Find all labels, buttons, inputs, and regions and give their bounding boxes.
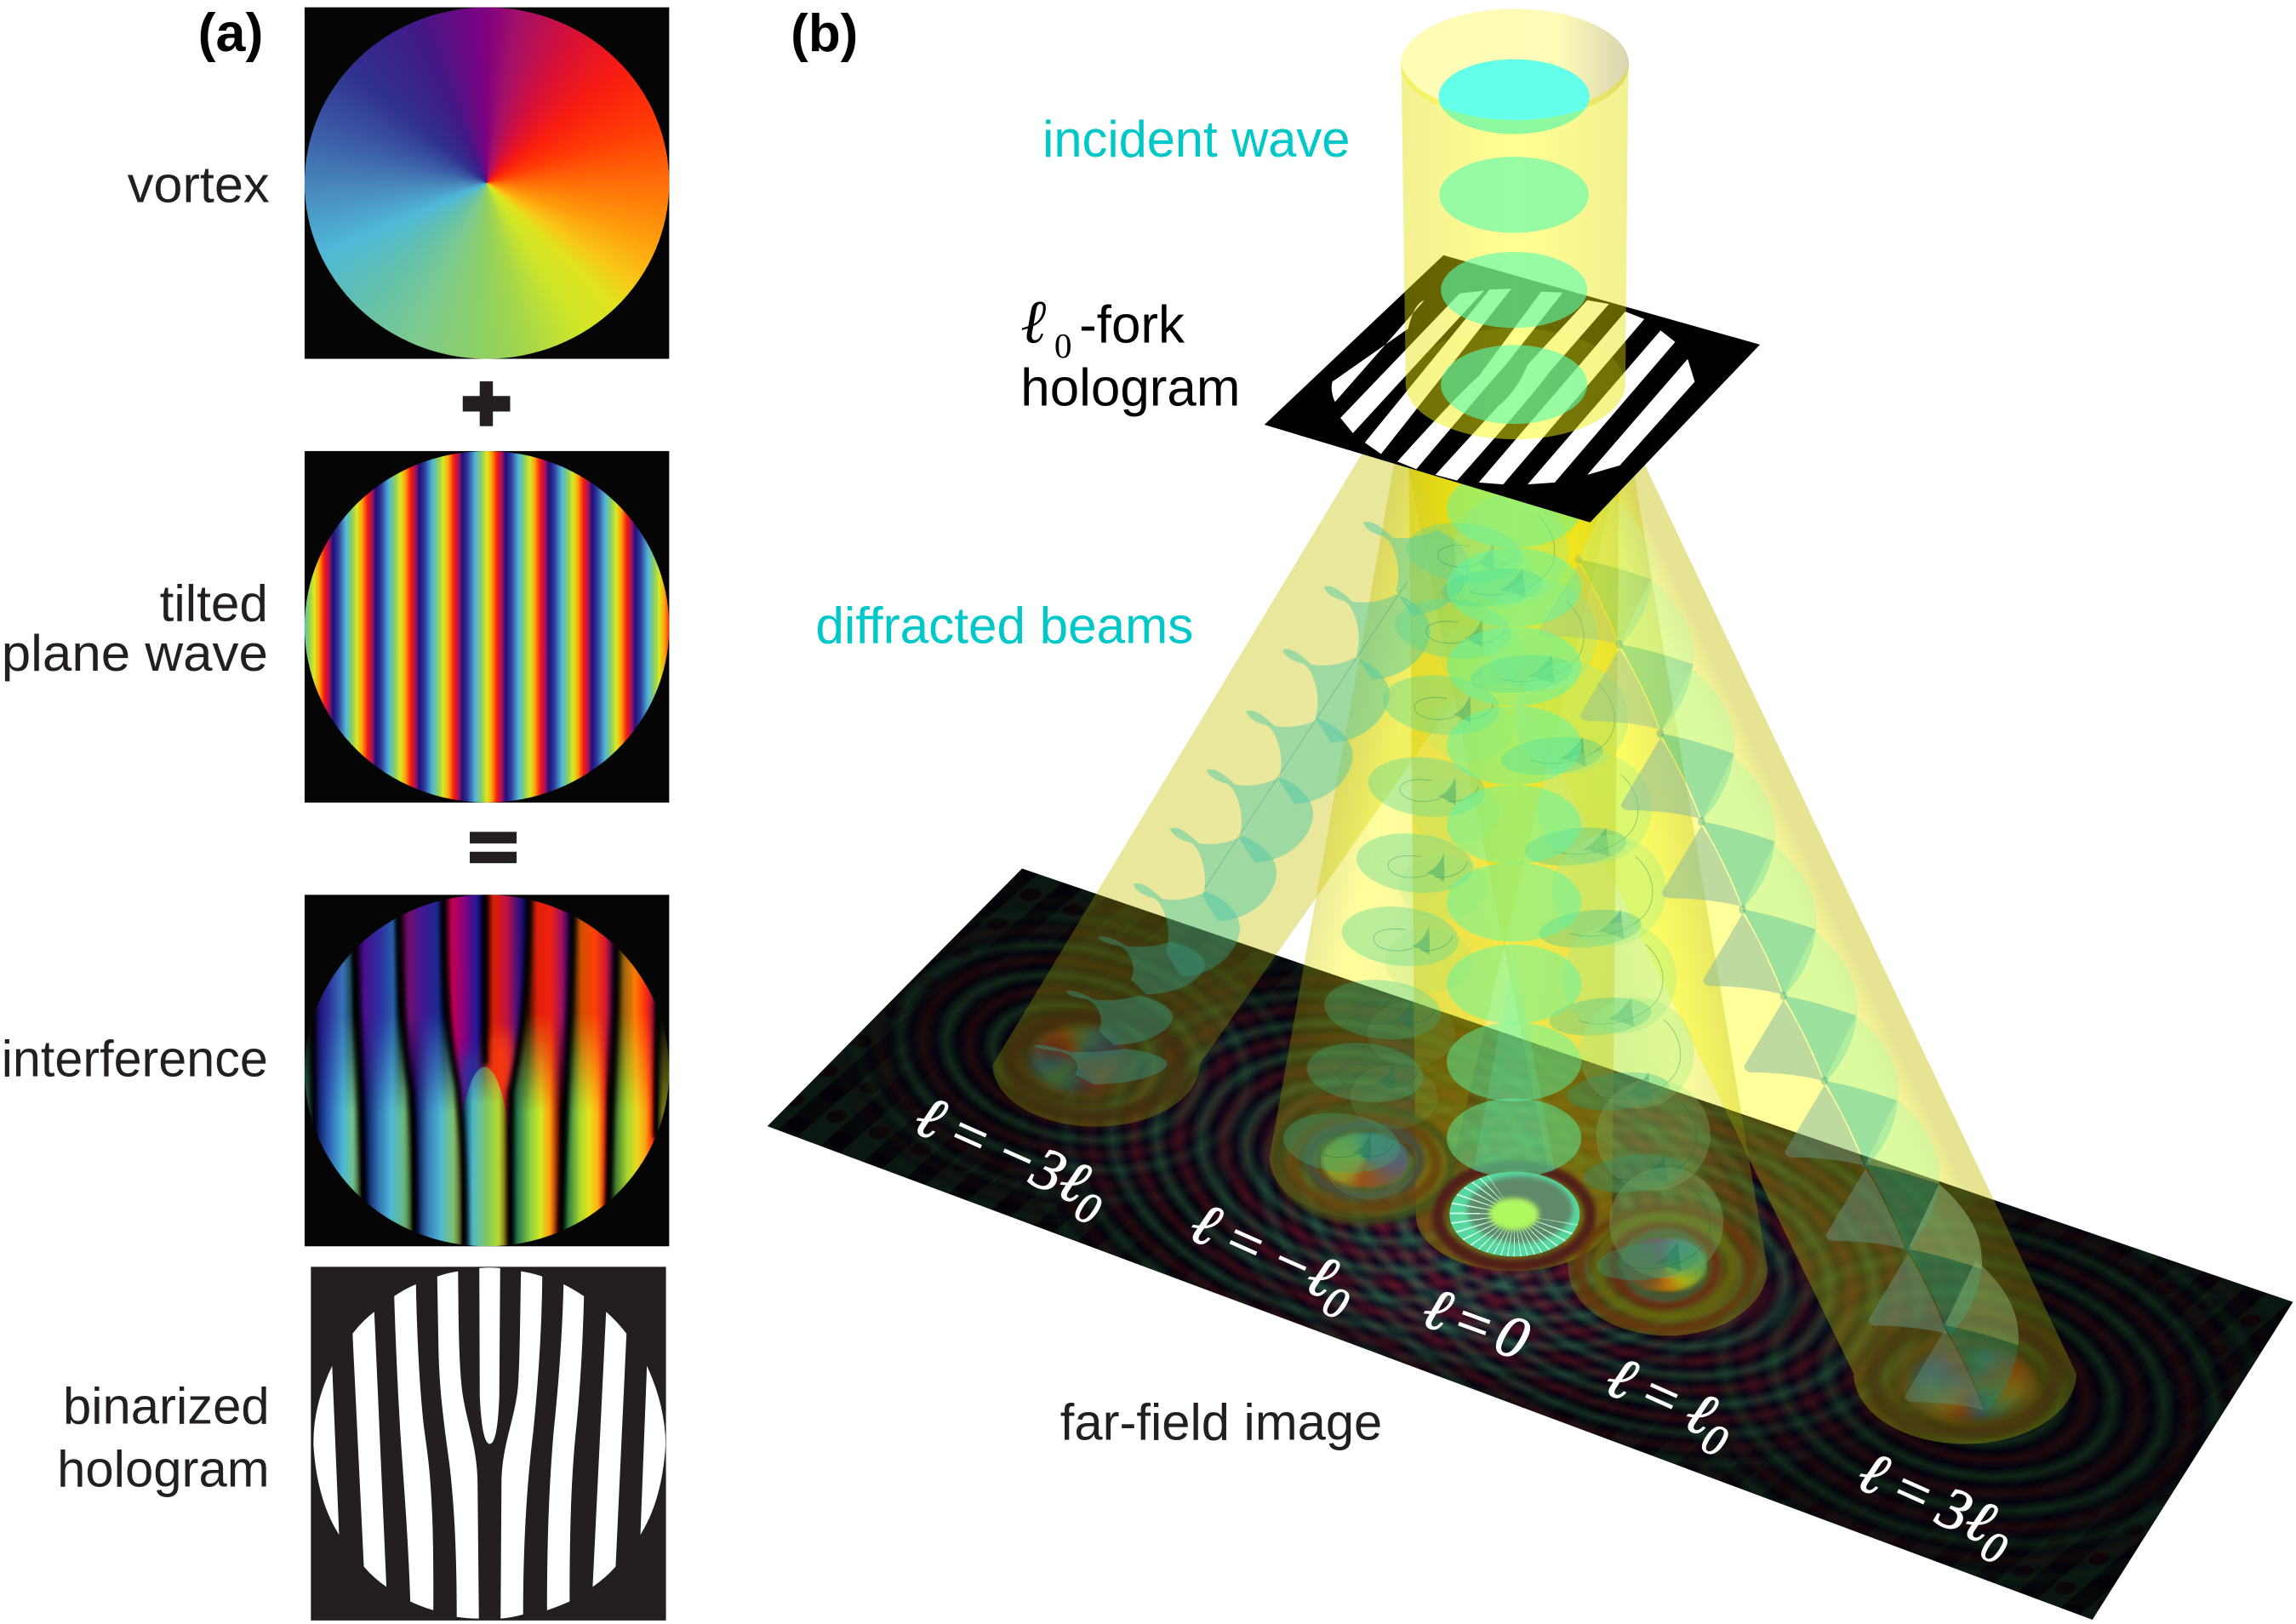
- text: tilted plane wave: tilted: [160, 575, 268, 632]
- focal spot with radial rays: l = 0: [1449, 1171, 1580, 1256]
- vortex spot: l = 1: [1622, 1238, 1707, 1292]
- text: vortex: vortex: [128, 155, 270, 213]
- text: l0-fork hologram: -fork: [1079, 296, 1185, 355]
- text: diffracted beams: diffracted beams: [815, 596, 1193, 654]
- diffracted beam: l = +3: [1398, 439, 2076, 1444]
- wavefront spirals: l = -1 beam: [1280, 518, 1538, 1199]
- text: far-field image: far-field image: [1060, 1392, 1382, 1450]
- incident wave cylinder: [1401, 9, 1629, 439]
- panel: interference fork pattern: [302, 894, 672, 1251]
- plane shading over beams: [768, 868, 2293, 1620]
- incident wavefront discs: [1439, 60, 1590, 424]
- label: l = l0: 0: [1694, 1414, 1734, 1467]
- wavefront spirals: l = -3 beam: [1034, 522, 1470, 1084]
- text: l0-fork hologram: [1020, 289, 1240, 418]
- panel: far-field image plane: [768, 868, 2296, 1620]
- vortex spot: l = -1: [1321, 1132, 1408, 1187]
- plane shading over wavefronts: [768, 868, 2293, 1620]
- label: l = 3 l0: ℓ = 3ℓ: [1848, 1438, 2005, 1557]
- text: l0-fork hologram: 0: [1054, 326, 1072, 365]
- panel: vortex phase disc: [305, 8, 669, 359]
- text: binarized hologram: binarized: [63, 1376, 270, 1434]
- panel: binarized fork hologram: [311, 1267, 666, 1621]
- diffracted beam: l = -1: [1270, 439, 1625, 1219]
- label: l = 0: ℓ=0: [1414, 1274, 1543, 1375]
- text: binarized hologram: hologram: [57, 1439, 270, 1497]
- text: binarized hologram: [57, 1376, 270, 1497]
- label: l = l0: ℓ = ℓ: [1596, 1343, 1726, 1450]
- text: interference: interference: [2, 1030, 268, 1088]
- panel label (b): (b): [791, 4, 858, 63]
- diffracted beam: l = +1: [1402, 439, 1768, 1335]
- label: l = -3 l0: ℓ = −3ℓ: [905, 1083, 1099, 1217]
- panel label (a): (a): [198, 3, 263, 63]
- icon: plus sign: [463, 381, 510, 426]
- label: l = -l0: 0: [1316, 1277, 1356, 1330]
- icon: equals sign: [470, 832, 517, 863]
- vortex spot: l = -3: [1025, 1023, 1127, 1095]
- panel: tilted plane wave stripes: [305, 451, 669, 803]
- wavefront spirals: l = +1 beam: [1439, 494, 1723, 1284]
- vortex spot: l = 3: [1905, 1347, 2036, 1423]
- beam footprint rings on the plane: [1010, 1015, 2056, 1432]
- text: incident wave: incident wave: [1042, 110, 1350, 168]
- text: tilted plane wave: plane wave: [2, 624, 268, 682]
- text: l0-fork hologram: hologram: [1020, 359, 1240, 418]
- panel: fork hologram plate in perspective: [1265, 255, 1760, 523]
- wavefront discs: l = 0 beam: [1447, 469, 1581, 1177]
- wavefront sails: l = +3 beam: [1539, 495, 2019, 1412]
- label: l = 3 l0: 0: [1973, 1521, 2013, 1575]
- text: l0-fork hologram: ℓ: [1020, 289, 1046, 357]
- text: tilted plane wave: [2, 575, 268, 682]
- diffracted beam: l = -3: [993, 439, 1617, 1127]
- label: l = -l0: ℓ = −ℓ: [1180, 1189, 1346, 1312]
- diffracted beam: l = 0: [1408, 439, 1619, 1271]
- label: l = -3 l0: 0: [1068, 1181, 1108, 1235]
